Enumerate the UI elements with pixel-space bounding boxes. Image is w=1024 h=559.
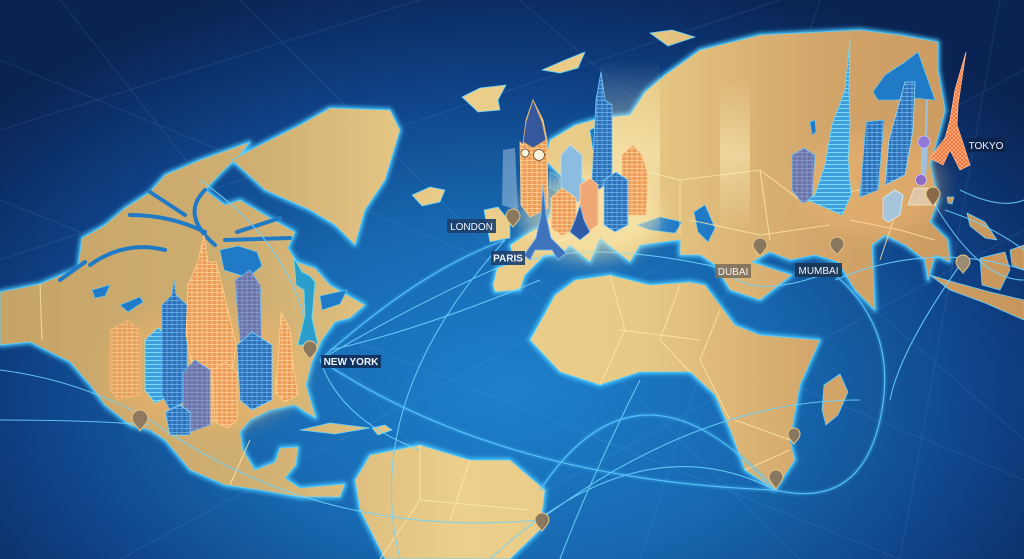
label: London: LONDON	[450, 222, 493, 233]
pin: New York	[303, 341, 317, 359]
glow: Asia landmarks	[795, 135, 945, 235]
landmarks: Europe	[502, 72, 648, 260]
building: dark small	[570, 205, 590, 240]
building: orange middle	[580, 178, 598, 232]
building: blue right	[235, 270, 262, 375]
building: cyan	[145, 328, 172, 403]
pin: Sao Paulo	[535, 513, 549, 531]
pin: Dubai	[753, 238, 767, 256]
label: Tokyo: TOKYO	[969, 141, 1004, 152]
pin: Cape Town	[769, 470, 783, 489]
Canadian channels	[60, 190, 290, 280]
building: orange right	[275, 312, 298, 402]
building: low blue	[165, 405, 190, 435]
land: North America	[0, 142, 365, 497]
Tokyo Tower	[930, 52, 970, 170]
building: dark blue	[183, 360, 210, 432]
label: Mumbai	[795, 263, 842, 277]
building: orange rear	[622, 145, 648, 215]
label: Dubai	[715, 264, 751, 278]
building: blue tower	[592, 72, 612, 190]
building: low	[883, 190, 903, 222]
label: London	[447, 219, 496, 233]
pin: London	[506, 209, 520, 227]
flight routes	[0, 180, 1024, 559]
landmarks: Asia	[792, 40, 970, 222]
building: blue tower	[162, 280, 187, 410]
pin: Mexico	[132, 410, 148, 431]
map pins	[132, 187, 970, 531]
pin: Shanghai	[926, 187, 940, 206]
landmarks: New York	[110, 235, 318, 435]
building: blue front	[604, 172, 628, 232]
building: left	[792, 148, 815, 203]
land: islands	[300, 30, 1024, 435]
label: New York: NEW YORK	[324, 357, 379, 368]
label: Mumbai: MUMBAI	[798, 266, 838, 277]
Oriental Pearl Tower	[908, 100, 936, 205]
statue of liberty	[294, 258, 318, 345]
light beams	[600, 60, 750, 250]
building: orange front	[212, 362, 237, 428]
glow: Europe landmarks	[520, 170, 660, 260]
building: orange front	[551, 188, 576, 236]
Burj Khalifa	[808, 40, 851, 215]
label: Paris: PARIS	[493, 254, 523, 264]
inland water	[92, 52, 935, 312]
building: orange left	[110, 320, 140, 400]
label: Dubai: DUBAI	[718, 267, 748, 278]
Shanghai Tower	[885, 82, 915, 185]
pin: Johannesburg	[788, 428, 800, 444]
country borders	[40, 170, 935, 559]
city labels	[321, 138, 1005, 368]
Eiffel Tower	[524, 185, 566, 260]
Big Ben	[520, 100, 548, 217]
land: South America	[355, 445, 545, 559]
building: light blue	[561, 145, 582, 205]
ghost building	[502, 148, 518, 210]
pin: Jakarta	[956, 255, 970, 273]
building: Empire State	[186, 235, 236, 425]
land: Eurasia	[493, 30, 950, 310]
land: Greenland	[232, 108, 400, 245]
Shanghai WFC	[860, 120, 884, 197]
land: Africa	[530, 275, 820, 490]
label: Paris	[491, 251, 525, 265]
building: blue front	[237, 332, 272, 410]
pin: Mumbai	[830, 237, 844, 255]
glow: New York landmarks	[105, 310, 305, 430]
